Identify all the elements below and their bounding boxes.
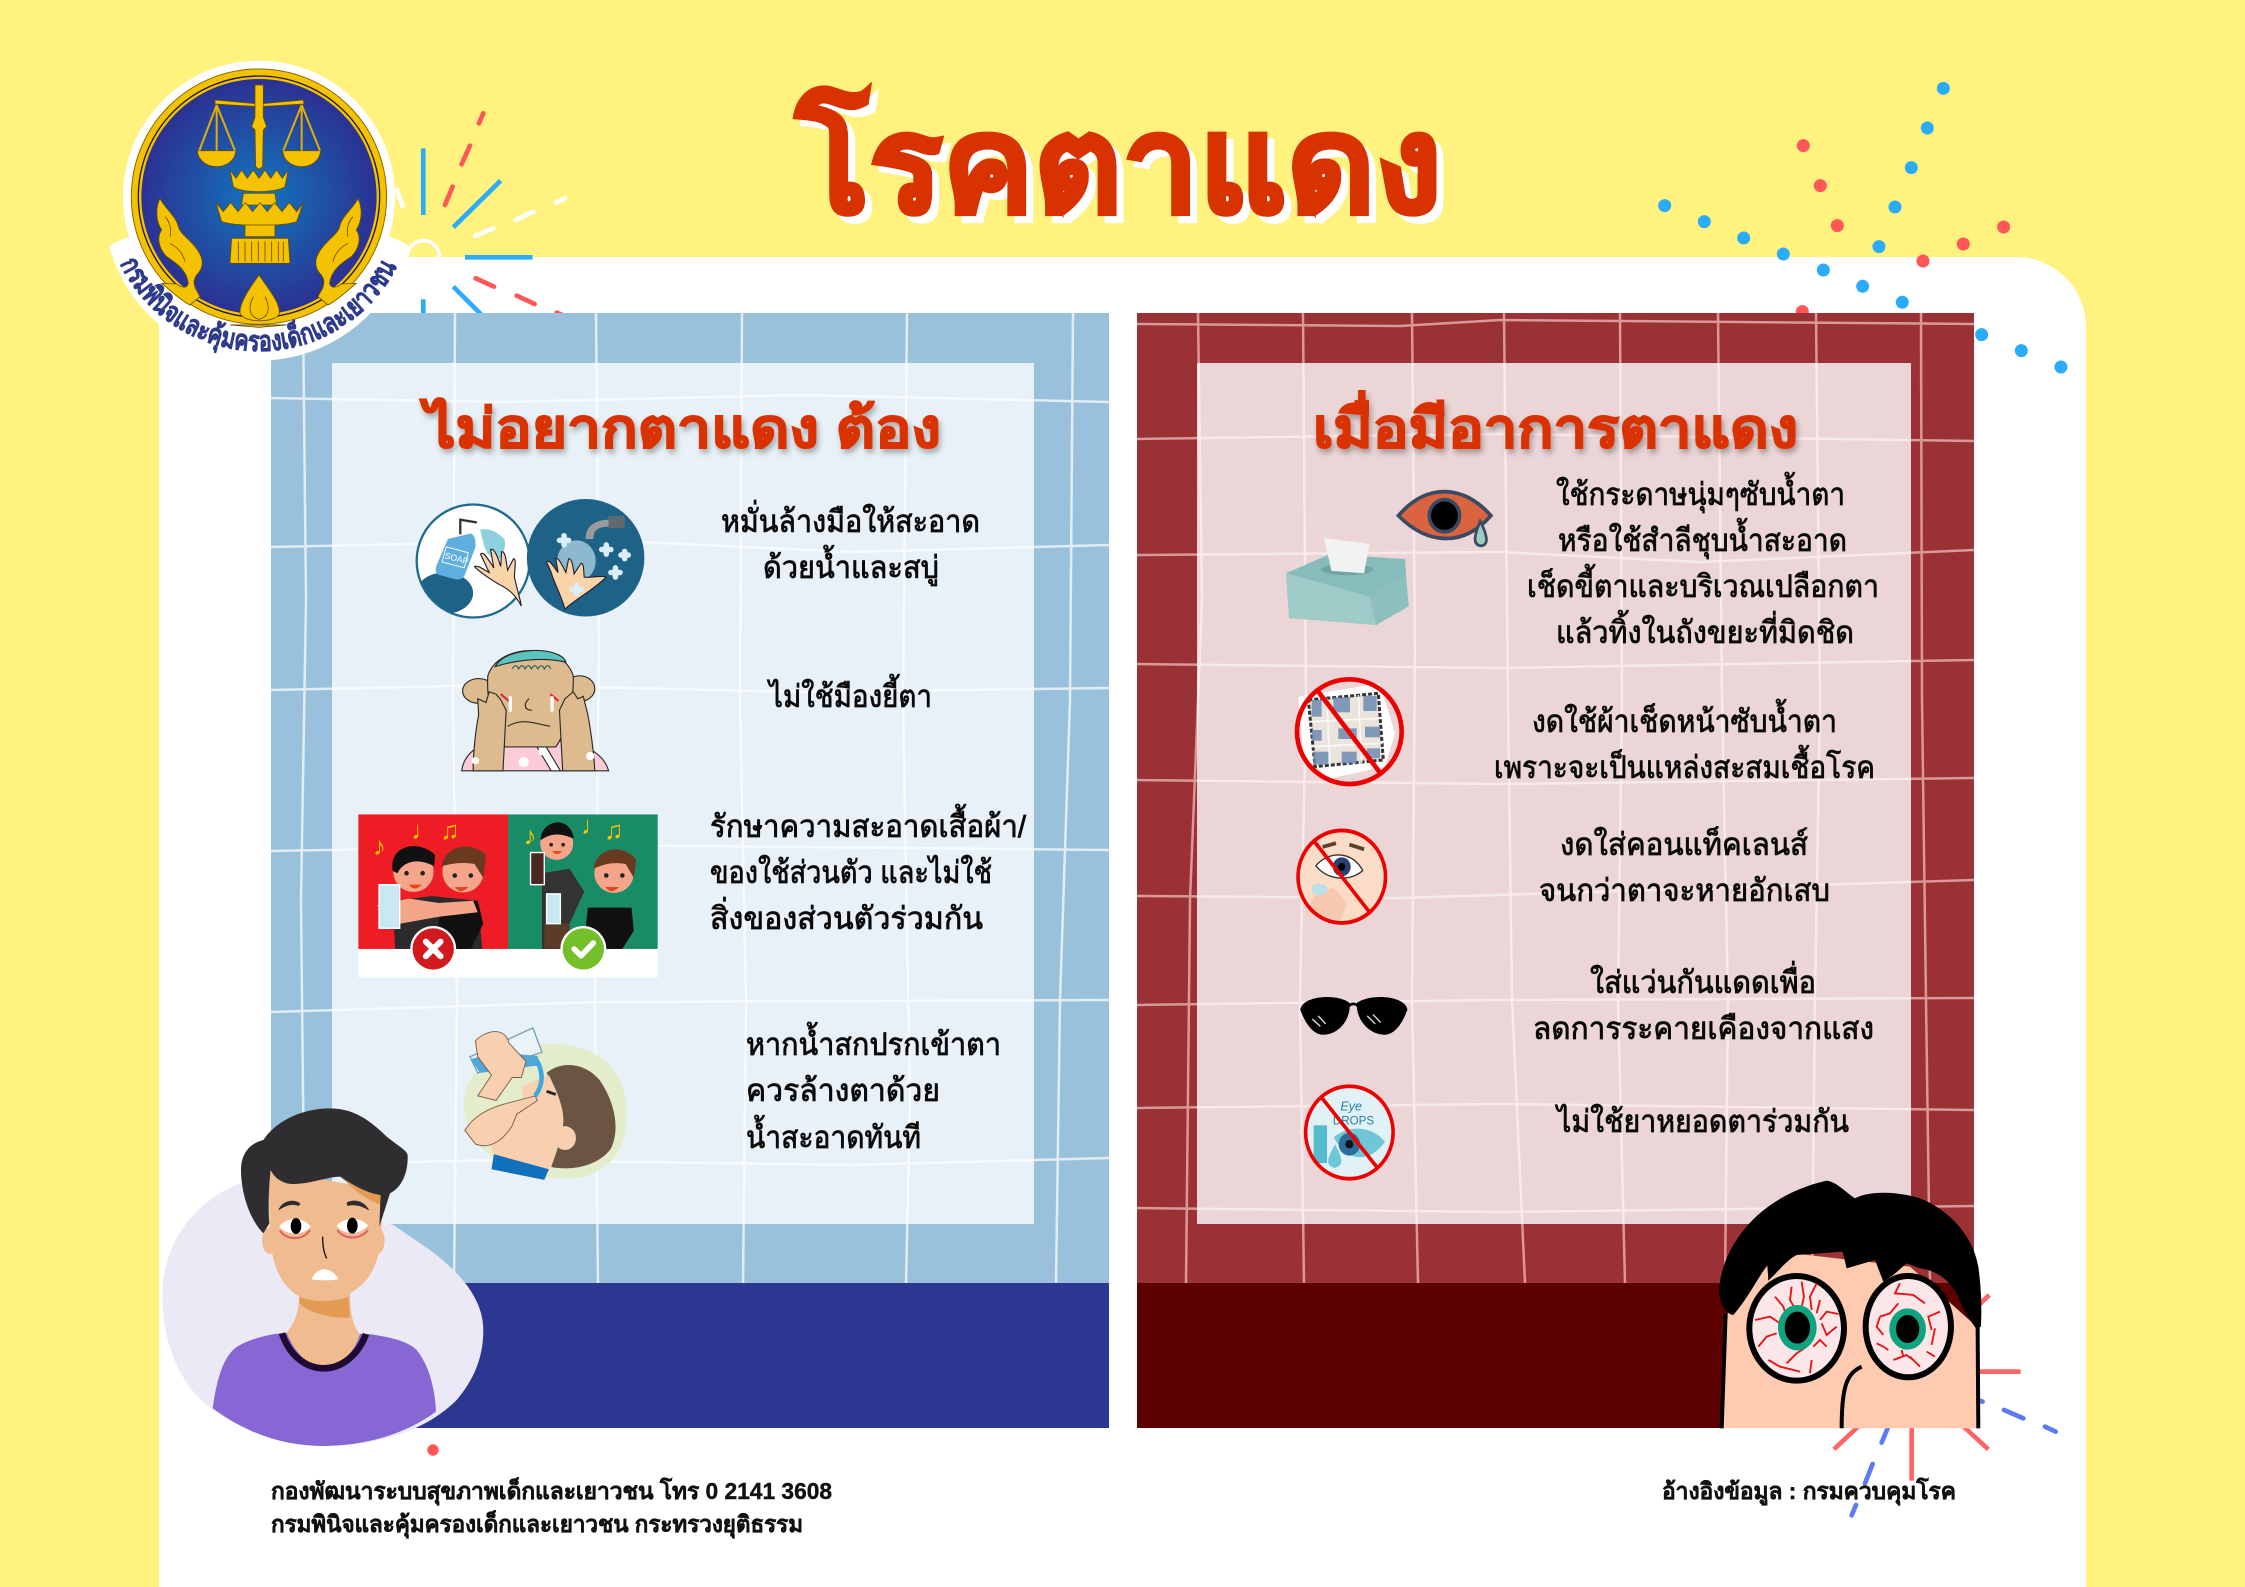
text: rinse eye (746, 1022, 1001, 1155)
decorative red dot (427, 1444, 439, 1456)
text: no towel (1494, 699, 1875, 785)
icon: sunglasses (1300, 997, 1407, 1035)
bottom right burst (1834, 1295, 2056, 1515)
text: wear sunglasses (1533, 961, 1874, 1046)
heading: symptoms: เมื่อมีอาการตาแดง (1313, 390, 1798, 459)
text: no towel: งดใช้ผ้าเช็ดหน้าซับน้ำตา (1532, 699, 1837, 739)
footer source right: อ้างอิงข้อมูล : กรมควบคุมโรค (1662, 1477, 1956, 1506)
logo: department seal (109, 60, 408, 360)
icon: do not share items photo: ♪ (373, 833, 386, 861)
text: keep clothes clean: ของใช้ส่วนตัว และไม่ใช้ (710, 855, 992, 890)
icon: do not share items photo (358, 812, 658, 977)
text: keep clothes clean: รักษาความสะอาดเสื้อผ้า/ (710, 804, 1026, 844)
icon: no shared eye drops: DROPS (1333, 1113, 1374, 1128)
text: wear sunglasses: ใส่แว่นกันแดดเพื่อ (1590, 961, 1816, 1000)
title: โรคตาแดง (794, 86, 1442, 241)
icon: no shared eye drops (1306, 1086, 1393, 1179)
logo: department seal: กรมพินิจและคุ้มครองเด็กและเยาวชน (120, 258, 397, 354)
footer credits left (271, 1476, 832, 1539)
icon: red teary eye and tissue box (1286, 492, 1491, 625)
icon: do not share items photo: ♩ (411, 817, 437, 845)
panel: prevention (blue) (271, 313, 1109, 1428)
white content card (159, 257, 2086, 1587)
icon: no shared eye drops: Eye (1340, 1098, 1362, 1113)
left decorative burst (397, 113, 567, 363)
text: no contact lenses (1539, 826, 1830, 908)
text: keep clothes clean: สิ่งของส่วนตัวร่วมกัน (710, 897, 983, 936)
text: wash hands: ด้วยน้ำและสบู่ (763, 545, 939, 586)
icon: hand washing: SOAP (444, 550, 470, 566)
panel: when symptomatic (red) (1137, 313, 1974, 1428)
icon: do not share items photo: ♫ (604, 817, 623, 845)
heading: prevention: ไม่อยากตาแดง ต้อง (419, 397, 941, 459)
character: boy with blob (162, 1108, 483, 1446)
character: bloodshot eyes man (1719, 1181, 1981, 1428)
text: rinse eye: น้ำสะอาดทันที (746, 1115, 921, 1155)
icon: do not share items photo: ♪ (524, 823, 536, 851)
icon: rubbing eyes (462, 650, 609, 771)
dark blue band (271, 1283, 1109, 1428)
text: use soft tissue: เช็ดขี้ตาและบริเวณเปลือกตา (1527, 564, 1879, 604)
text: wear sunglasses: ลดการระคายเคืองจากแสง (1533, 1011, 1874, 1046)
text: use soft tissue (1527, 472, 1879, 650)
text: do not rub eyes: ไม่ใช้มืองยี้ตา (766, 674, 932, 714)
footer credits left: กรมพินิจและคุ้มครองเด็กและเยาวชน กระทรวงยุติธรรม (271, 1509, 803, 1539)
text: wash hands: หมั่นล้างมือให้สะอาด (721, 500, 980, 539)
text: no contact lenses: จนกว่าตาจะหายอักเสบ (1539, 873, 1830, 908)
text: rinse eye: ควรล้างตาด้วย (746, 1073, 940, 1108)
text: keep clothes clean (710, 804, 1026, 936)
icon: do not share items photo: ♫ (440, 817, 459, 845)
icon: hand washing (416, 499, 644, 617)
icon: no contact lens (1298, 830, 1386, 923)
footer credits left: กองพัฒนาระบบสุขภาพเด็กและเยาวชน โทร 0 2141 3608 (271, 1476, 832, 1506)
text: use soft tissue: ใช้กระดาษนุ่มๆซับน้ำตา (1556, 472, 1845, 514)
icon: no handkerchief (1297, 679, 1402, 784)
icon: rinsing eye with water (464, 1028, 627, 1180)
top right confetti dots (1658, 82, 2067, 373)
icon: do not share items photo: ♩ (581, 812, 607, 840)
dark maroon band (1137, 1283, 1974, 1428)
text: use soft tissue: แล้วทิ้งในถังขยะที่มิดชิด (1556, 610, 1854, 650)
text: use soft tissue: หรือใช้สำลีชุบน้ำสะอาด (1558, 518, 1847, 560)
text: wash hands (721, 500, 980, 586)
text: rinse eye: หากน้ำสกปรกเข้าตา (746, 1022, 1001, 1062)
text: no contact lenses: งดใส่คอนแท็คเลนส์ (1560, 826, 1808, 862)
text: no towel: เพราะจะเป็นแหล่งสะสมเชื้อโรค (1494, 745, 1875, 785)
text: no shared eye drops: ไม่ใช้ยาหยอดตาร่วมกัน (1554, 1104, 1849, 1139)
